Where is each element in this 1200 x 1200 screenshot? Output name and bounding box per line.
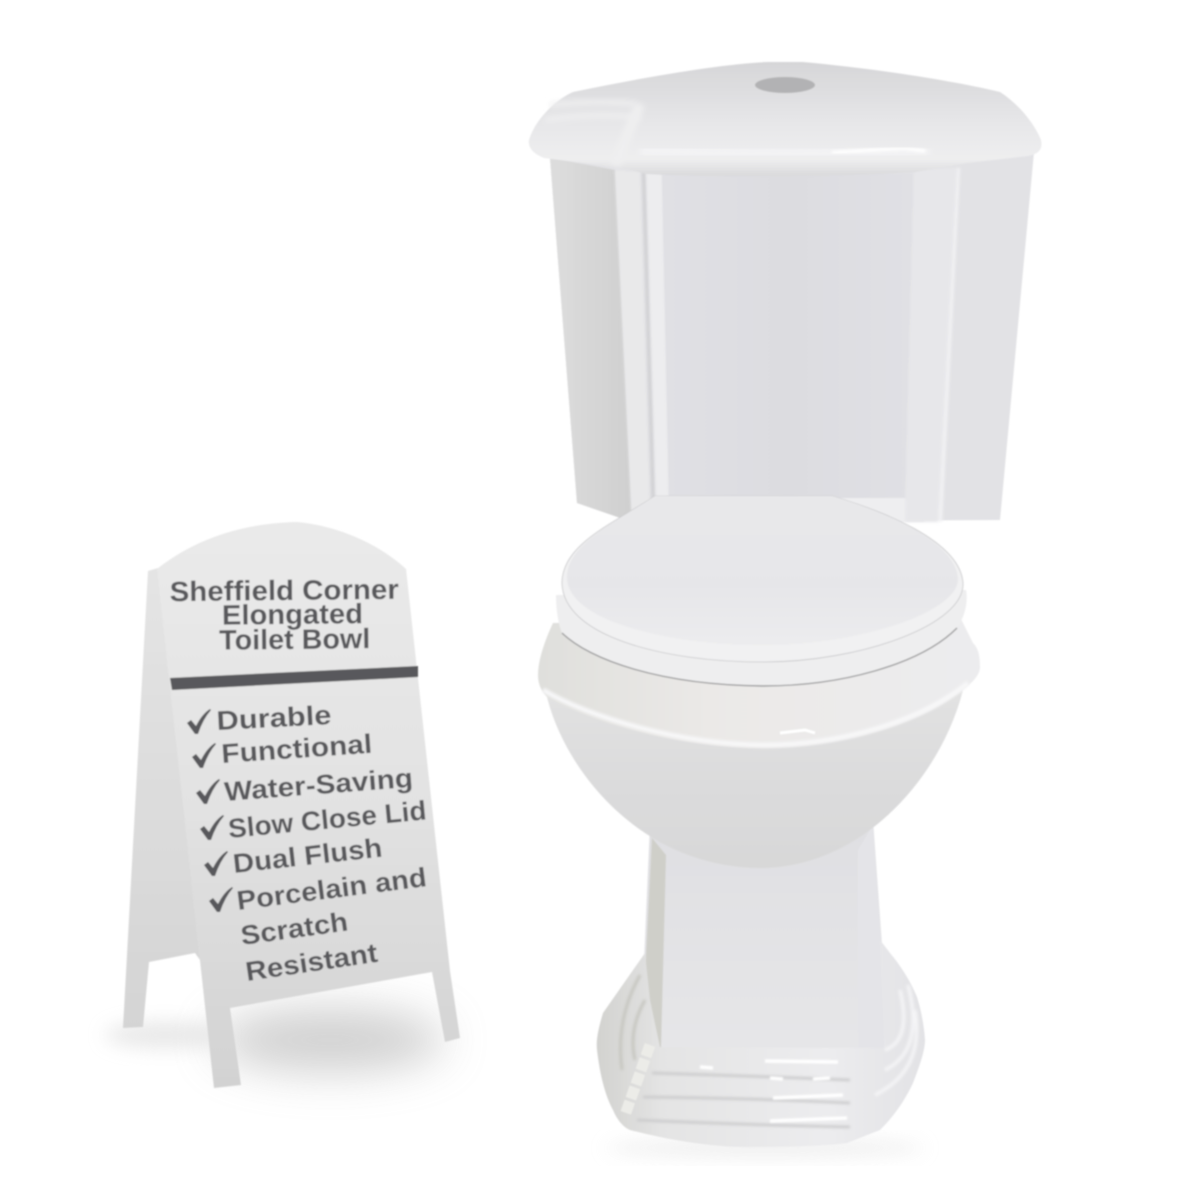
sign: A-frame with product features [123, 522, 460, 1088]
check: durable [187, 709, 211, 734]
toilet [529, 62, 1041, 1147]
sign back panel [123, 568, 200, 1028]
sign title: Sheffield Corner [170, 574, 399, 607]
seat ring [556, 590, 967, 687]
sign title: Toilet Bowl [219, 623, 370, 656]
sign front panel [157, 522, 460, 1088]
check: slow close lid [200, 815, 224, 840]
check: porcelain [209, 887, 233, 912]
feature list: Resistant [243, 938, 379, 987]
flush button [755, 77, 815, 93]
corner beads [625, 1045, 650, 1115]
feature list: Dual Flush [231, 833, 384, 879]
bowl lower [547, 690, 963, 868]
band highlights [700, 1061, 847, 1121]
toilet tank body [550, 152, 1034, 522]
feature list [187, 700, 428, 987]
feature list: Durable [216, 700, 332, 736]
sign divider bar [170, 666, 418, 690]
sign title: Elongated [222, 598, 363, 631]
check: water-saving [196, 779, 220, 804]
feature list: Porcelain and [235, 862, 428, 916]
feature list: Water-Saving [223, 763, 414, 807]
sign title [170, 574, 399, 656]
feature list: Slow Close Lid [227, 795, 428, 844]
check: functional [192, 743, 216, 768]
check: dual flush [204, 851, 228, 876]
feature list: Scratch [239, 907, 350, 951]
toilet base [597, 940, 925, 1147]
feature list: Functional [220, 729, 373, 769]
pedestal [644, 820, 885, 1060]
bowl rim [538, 617, 980, 748]
seat lid [562, 496, 963, 662]
tank lid [529, 62, 1041, 176]
floor shadows [105, 1008, 925, 1156]
